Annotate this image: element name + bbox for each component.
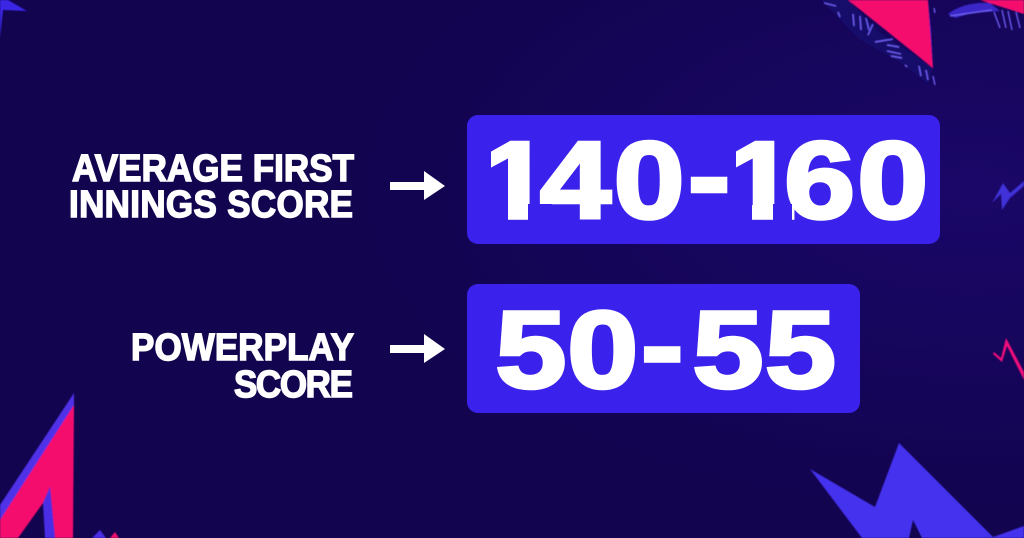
- decoration: bottom left pink and blue spike: [0, 393, 119, 538]
- decoration: top left blue star: [0, 0, 27, 38]
- label: average first innings score: [69, 147, 354, 225]
- label: powerplay score: SCORE: [234, 363, 353, 405]
- decoration: right pink bolt: [993, 338, 1024, 380]
- panel: 50-55: [467, 284, 860, 413]
- label: average first innings score: INNINGS SCORE: [69, 183, 353, 225]
- panel: 140-160: [467, 115, 940, 244]
- decoration: right blue bolt: [992, 181, 1024, 210]
- arrow: first row: [390, 171, 445, 200]
- label: powerplay score: [131, 326, 354, 405]
- value: 50-55: 50-55: [495, 284, 836, 412]
- label: average first innings score: AVERAGE FIRST: [72, 147, 354, 189]
- decoration: bottom right blue bolt: [810, 443, 1024, 538]
- value: 140-160: 140-160: [480, 115, 928, 242]
- label: powerplay score: POWERPLAY: [131, 326, 354, 368]
- decoration: top right pink triangles with hatching: [821, 0, 1024, 85]
- arrow: second row: [390, 334, 445, 363]
